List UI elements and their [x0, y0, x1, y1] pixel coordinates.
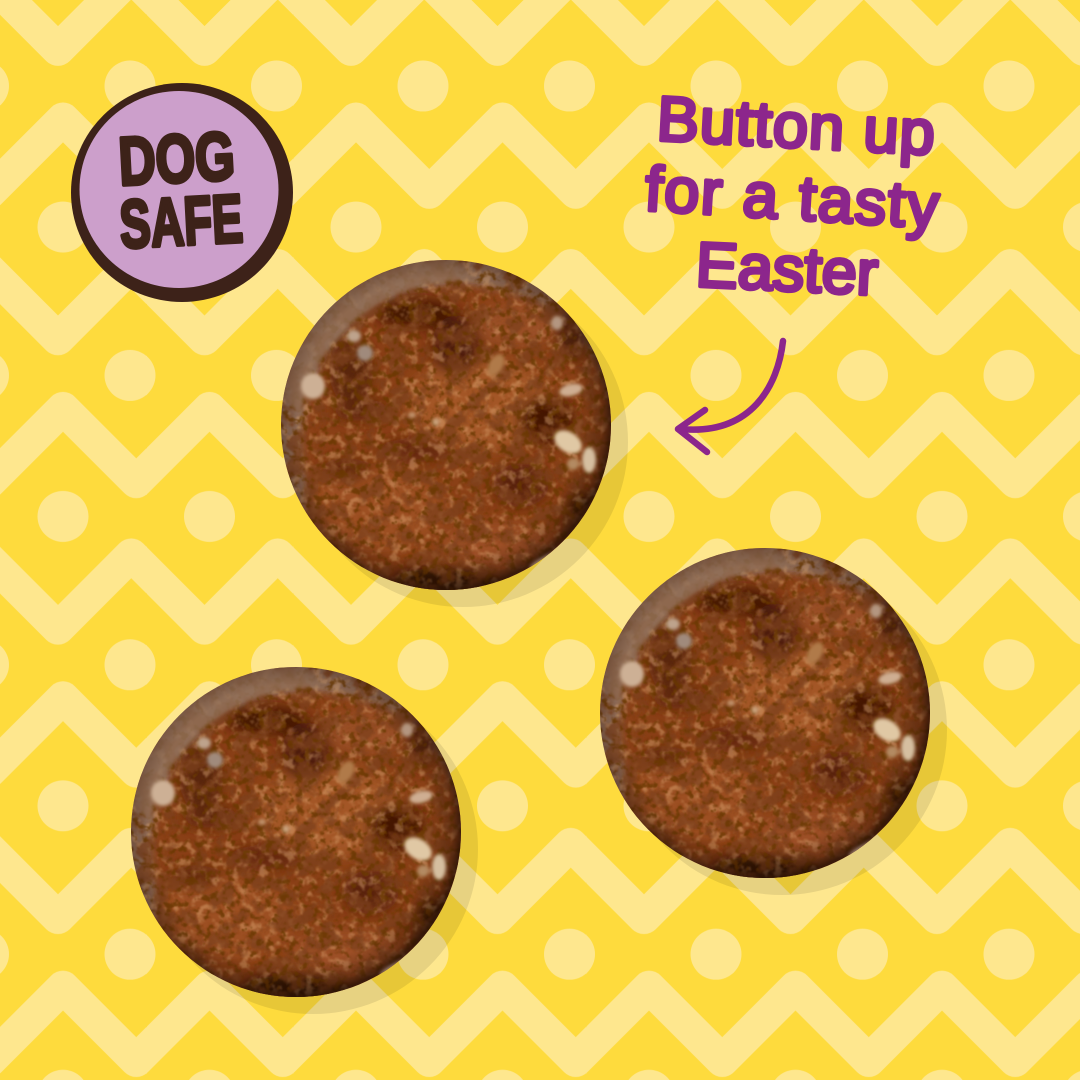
headline line 2: for a tasty	[643, 154, 941, 242]
treat: bottom-left button biscuit	[131, 667, 478, 1014]
badge text: DOG: DOG	[117, 118, 237, 200]
shadow	[617, 565, 947, 895]
badge: dog safe	[71, 83, 293, 302]
headline line 3: Easter	[694, 230, 880, 309]
biscuit	[131, 667, 468, 1008]
shadow	[148, 684, 478, 1014]
biscuit	[281, 260, 618, 601]
headline line 1: Button up	[655, 84, 937, 169]
badge ring	[71, 83, 293, 302]
treat: right button biscuit	[600, 548, 947, 895]
treat: top button biscuit	[281, 260, 628, 607]
biscuit	[600, 548, 937, 889]
badge fill	[80, 91, 278, 288]
headline: Button up for a tasty Easter	[643, 84, 941, 309]
arrow: curved arrow pointing to button treat	[678, 341, 783, 452]
shadow	[298, 277, 628, 607]
badge text: SAFE: SAFE	[118, 181, 245, 263]
